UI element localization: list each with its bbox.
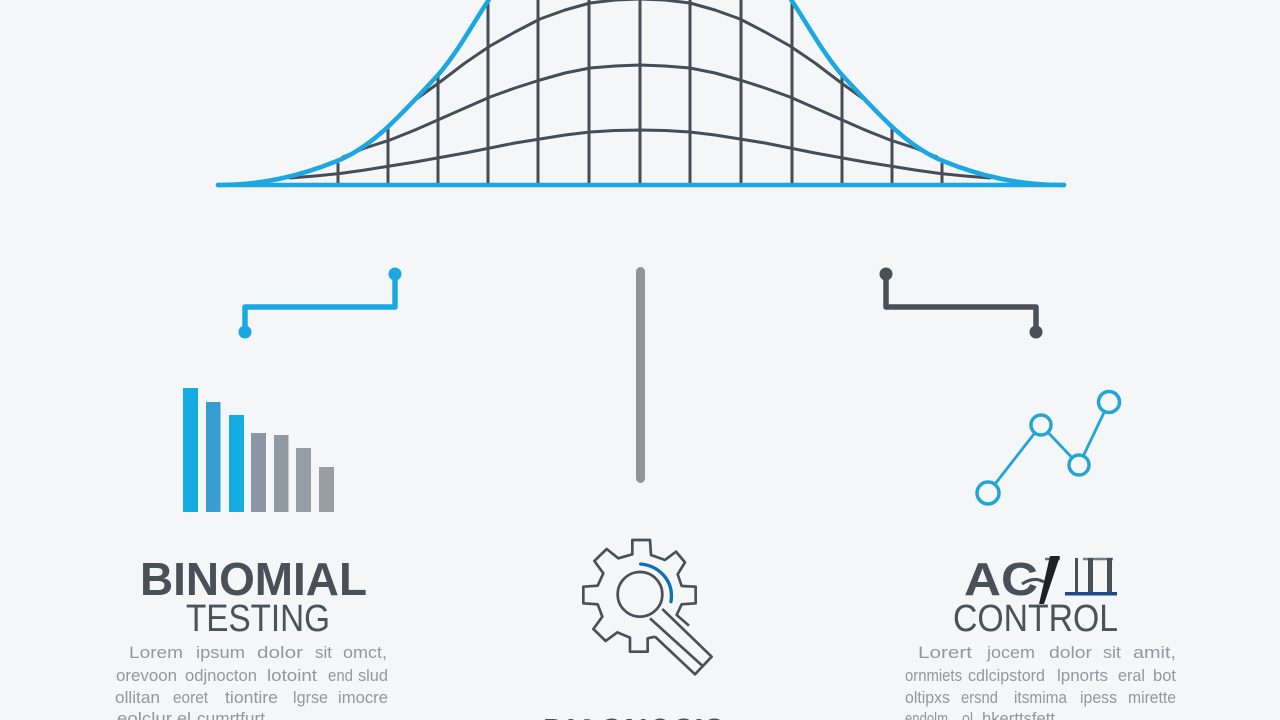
- body text right: lpnorts: [1057, 666, 1108, 685]
- body text left: eoret: [173, 688, 208, 707]
- heading: garbled ac mark: [964, 553, 1117, 605]
- body text right: itsmima: [1014, 688, 1067, 707]
- subheading: testing: TESTING: [186, 598, 330, 640]
- body text left: orevoon: [116, 666, 177, 685]
- body text right: mirette: [1128, 688, 1176, 707]
- body text right: eral: [1118, 666, 1145, 685]
- heading: garbled ac mark: AC: [964, 553, 1038, 605]
- body text right: bot: [1153, 666, 1176, 685]
- body text right: dolor: [1049, 643, 1092, 662]
- heading: binomial: BINOMIAL: [140, 553, 367, 605]
- body text left: omct,: [343, 643, 387, 662]
- body text left: ipsum: [196, 643, 245, 662]
- right column text: [905, 553, 1176, 720]
- subheading: control: CONTROL: [953, 598, 1118, 640]
- body text left: lotoint: [267, 666, 317, 685]
- icon: gear with magnifier: [583, 540, 712, 674]
- body text right: jocem: [986, 643, 1035, 662]
- body text left: end: [328, 666, 353, 685]
- body text left: tiontire: [225, 688, 278, 707]
- body text left: imocre: [338, 688, 388, 707]
- body text right: cdlcipstord: [968, 666, 1045, 685]
- center connector: [636, 267, 645, 483]
- body text left: [115, 643, 388, 720]
- body text left: slud: [358, 666, 388, 685]
- body text right: ersnd: [961, 688, 998, 707]
- body text right: amit,: [1133, 643, 1176, 662]
- body text right: ipess: [1080, 688, 1117, 707]
- body text right: sit: [1103, 643, 1121, 662]
- bell curve chart: [218, 0, 1064, 185]
- left connector: [238, 268, 402, 338]
- icon: line chart: [977, 392, 1120, 504]
- body text left: odjnocton: [185, 666, 257, 685]
- body text right: [905, 643, 1176, 720]
- body text left: Lorem: [129, 643, 183, 662]
- body text right: Lorert: [918, 643, 972, 662]
- left column text: [115, 553, 388, 720]
- icon: bar chart: [183, 388, 334, 512]
- body text left: ollitan: [115, 688, 160, 707]
- body text right: oltipxs: [905, 688, 950, 707]
- body text right: ornmiets: [905, 666, 962, 685]
- body text left: lgrse: [293, 688, 328, 707]
- right connector: [880, 268, 1042, 338]
- body text left: sit: [315, 643, 332, 662]
- body text left: dolor: [257, 643, 303, 662]
